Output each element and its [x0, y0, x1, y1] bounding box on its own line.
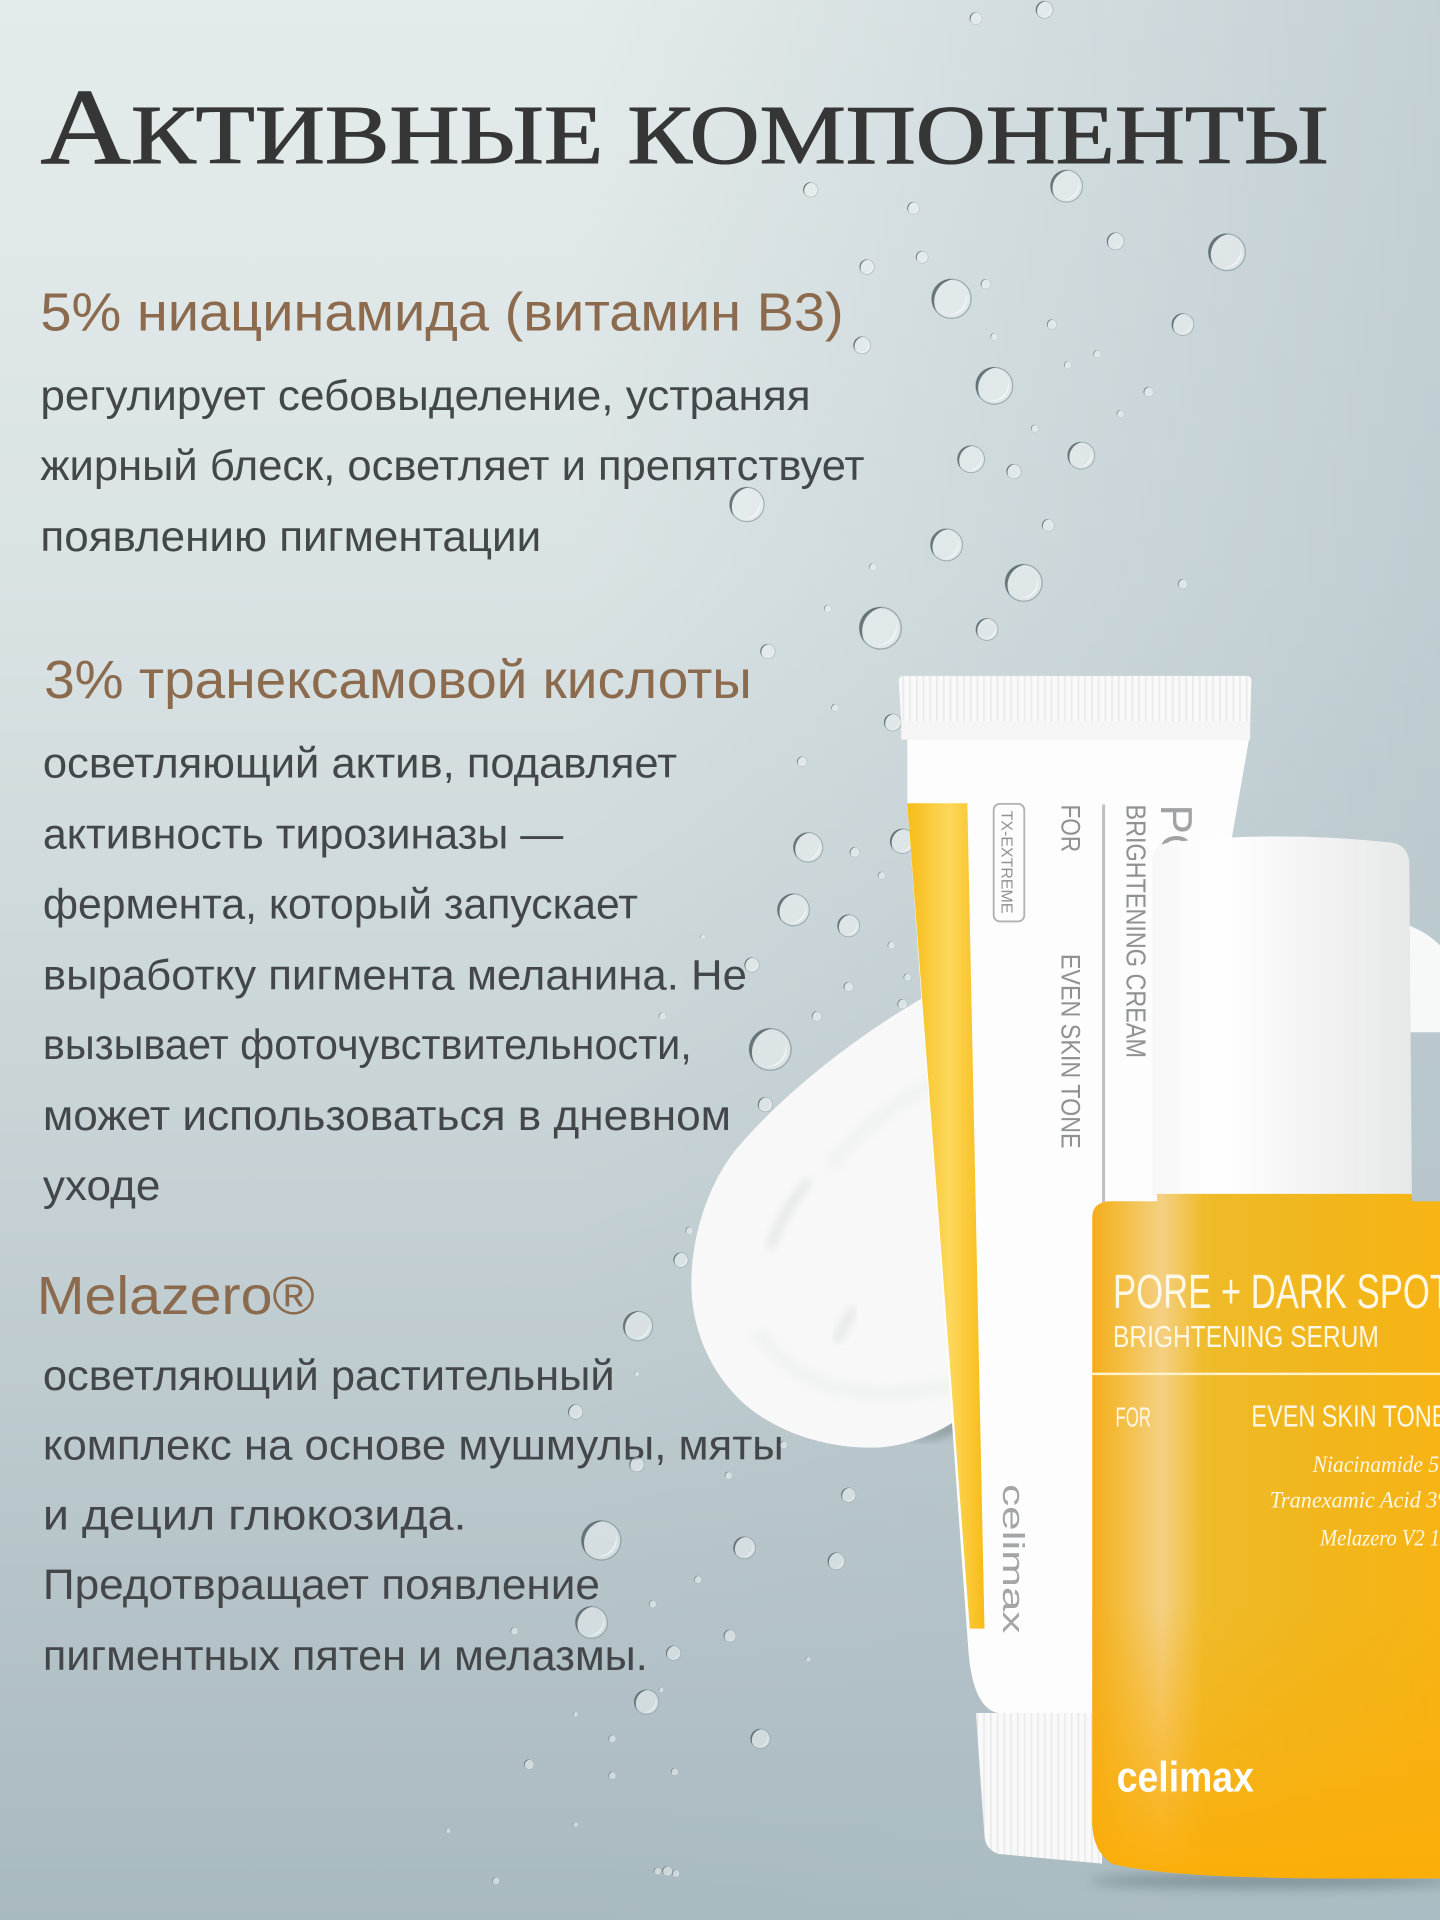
heading: niacinamide: 5% ниацинамида (витамин В3) [40, 283, 844, 343]
tube label text: BRIGHTENING CREAM [1121, 804, 1152, 1058]
text block: melazero description: комплекс на основе мушмулы, мяты [43, 1422, 784, 1470]
bottle label text: BRIGHTENING SERUM [1113, 1320, 1379, 1354]
water droplets [446, 1, 1245, 1884]
text block: tranexamic acid description: вызывает фоточувствительности, [43, 1021, 692, 1069]
text block: niacinamide description [40, 372, 864, 561]
tube cap [976, 1713, 1102, 1864]
bottle cap [1152, 836, 1412, 1196]
section: tranexamic acid [43, 650, 752, 1210]
text block: tranexamic acid description: может использоваться в дневном [43, 1092, 731, 1140]
text block: melazero description [43, 1352, 784, 1680]
text block: tranexamic acid description: уходе [43, 1162, 160, 1210]
tube body [907, 740, 1249, 1713]
tube label text: FOR [1056, 804, 1086, 852]
tube label text [994, 804, 1200, 1633]
tube yellow band [907, 803, 984, 1629]
text block: tranexamic acid description: активность тирозиназы — [43, 811, 563, 859]
heading: tranexamic acid: 3% транексамовой кислоты [44, 650, 752, 710]
bottle body [1092, 1194, 1440, 1878]
tube label text: PORE [1151, 804, 1200, 929]
text block: tranexamic acid description: фермента, который запускает [43, 880, 638, 928]
section: niacinamide [40, 283, 864, 561]
text block: niacinamide description: жирный блеск, осветляет и препятствует [40, 442, 864, 490]
text block: melazero description: Предотвращает появление [43, 1561, 600, 1609]
tube label text: TX-EXTREME [998, 811, 1015, 913]
text block: melazero description: и децил глюкозида. [43, 1491, 467, 1539]
tube crimped top [899, 676, 1251, 740]
text block: melazero description: пигментных пятен и мелазмы. [43, 1632, 648, 1680]
bottle label text [1092, 1266, 1440, 1801]
section: melazero [37, 1266, 784, 1680]
product: tube [899, 676, 1251, 1864]
cream swatch [691, 997, 980, 1448]
bottle shadow [1090, 1873, 1440, 1888]
text block: melazero description: осветляющий растительный [43, 1352, 615, 1400]
text block: niacinamide description: появлению пигментации [40, 513, 541, 561]
bottle label text: FOR [1116, 1402, 1151, 1433]
product: serum bottle [1092, 836, 1440, 1878]
cream swatch behind bottle [1409, 926, 1440, 1032]
text block: tranexamic acid description [43, 740, 747, 1210]
tube label text: celimax [996, 1484, 1030, 1633]
heading: melazero: Melazero® [37, 1266, 315, 1326]
bottle label text: celimax [1117, 1753, 1254, 1801]
text block: tranexamic acid description: выработку пигмента меланина. Не [43, 951, 747, 999]
tube label text: EVEN SKIN TONE [1056, 954, 1086, 1149]
text block: tranexamic acid description: осветляющий актив, подавляет [43, 740, 677, 788]
text block: niacinamide description: регулирует себовыделение, устраняя [40, 372, 811, 420]
title: АКТИВНЫЕ КОМПОНЕНТЫ [40, 68, 1329, 187]
